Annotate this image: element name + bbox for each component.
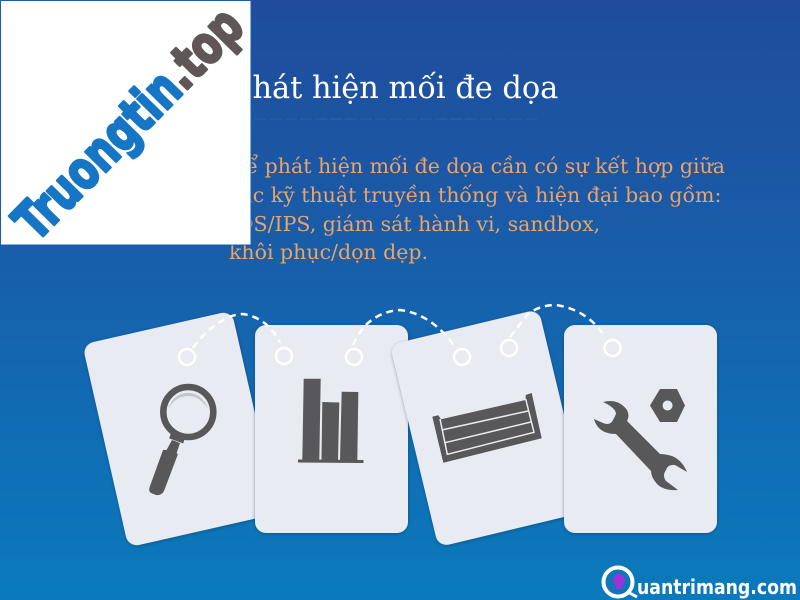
- body text: các kỹ thuật truyền thống và hiện đại bao gồm:: [229, 183, 721, 207]
- watermark box: [0, 0, 256, 252]
- body text: Để phát hiện mối đe dọa cần có sự kết hợp giữa: [229, 154, 725, 178]
- icon: magnifying glass: [149, 387, 213, 495]
- card 1: magnifier: [82, 311, 278, 547]
- card 4: tools: [564, 325, 717, 533]
- icon: wrench: [594, 401, 687, 490]
- icon: crate: [432, 393, 542, 463]
- card 2: bar chart: [255, 325, 408, 533]
- body text: khôi phục/dọn dẹp.: [229, 240, 428, 264]
- body text: IDS/IPS, giám sát hành vi, sandbox,: [229, 212, 600, 236]
- icon: bar chart: [298, 379, 364, 463]
- title: Phát hiện mối đe dọa: [232, 71, 558, 106]
- logo: quantrimang: [604, 568, 797, 599]
- body text: [229, 154, 725, 264]
- connector rings: [179, 340, 620, 365]
- card 3: crate: [390, 309, 587, 547]
- icon: hex nut: [650, 389, 685, 422]
- dashed connectors: [193, 305, 605, 348]
